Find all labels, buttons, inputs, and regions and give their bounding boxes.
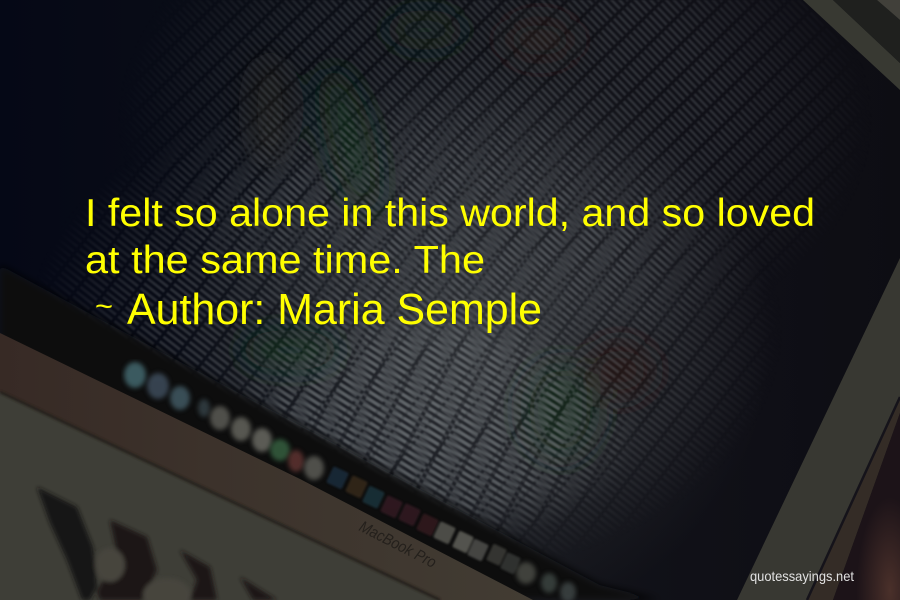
author: Author: Maria Semple bbox=[127, 285, 542, 334]
dark right corner bbox=[833, 413, 900, 600]
keyboard deck bbox=[0, 392, 440, 600]
quote line 2: at the same time. The bbox=[85, 239, 485, 282]
MacBook Pro label: MacBook Pro bbox=[356, 518, 439, 572]
keyboard keys bbox=[37, 487, 277, 600]
top right bezel strip bbox=[803, 0, 900, 90]
right bezel bbox=[737, 258, 900, 600]
soft glow in screen centre bbox=[248, 131, 688, 538]
watermark: quotessayings.net bbox=[750, 568, 854, 584]
code text texture, bottom bbox=[246, 312, 623, 530]
quote text bbox=[85, 192, 815, 334]
dock icons bbox=[124, 362, 576, 600]
laptop bezel band bbox=[0, 333, 533, 600]
dark lower screen edge bbox=[0, 265, 660, 600]
hinge strip bbox=[807, 397, 900, 600]
colour blotches on screen bbox=[240, 10, 655, 460]
code text texture, top bbox=[163, 0, 826, 330]
tilde: ~ bbox=[95, 290, 113, 323]
quote line 1: I felt so alone in this world, and so loved bbox=[85, 192, 815, 235]
code text texture, middle bbox=[68, 104, 746, 539]
